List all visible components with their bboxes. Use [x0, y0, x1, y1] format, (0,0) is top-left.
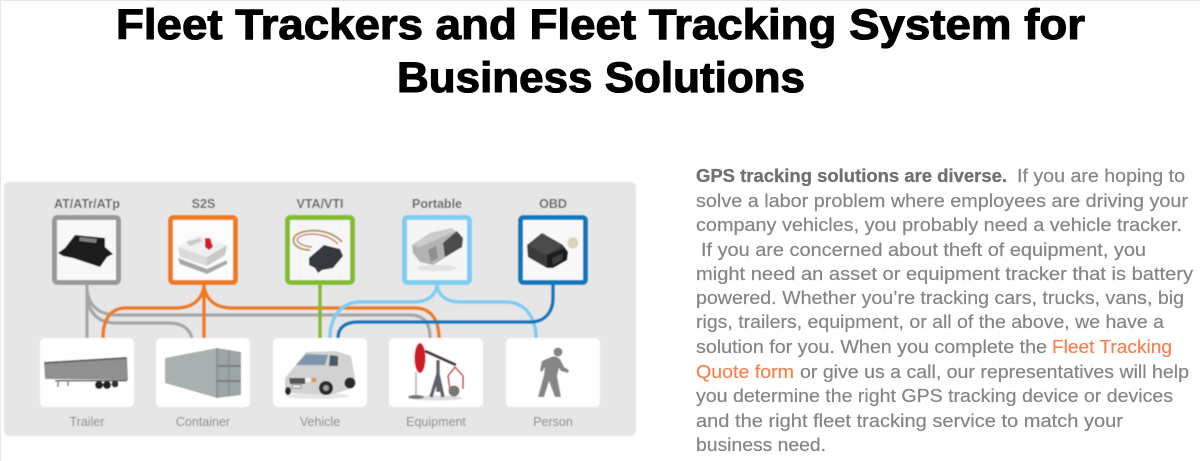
device: S2S: S2S: [192, 197, 215, 211]
text block: description: you determine the right GPS tracking device or devices: [696, 385, 1173, 406]
target: Trailer: [40, 338, 134, 429]
target: Trailer: Trailer: [70, 415, 104, 429]
icon: van: [285, 351, 356, 399]
target: Container: Container: [176, 415, 230, 429]
icon: trailer: [44, 357, 128, 389]
text block: description: business need.: [696, 434, 826, 455]
text block: description: solution for you. When you complete the: [696, 336, 1047, 357]
connector lines: orange from S2S: [103, 285, 439, 338]
device: OBD: [520, 197, 586, 282]
device: AT/ATr/ATp: [54, 197, 120, 282]
text block: description: rigs, trailers, equipment, or all of the above, we have a: [696, 311, 1165, 332]
icon: oil pumpjack: [408, 343, 463, 400]
device: OBD: OBD: [539, 197, 567, 211]
text block: description: or give us a call, our representatives will help: [800, 361, 1189, 382]
target: Vehicle: [273, 338, 367, 429]
icon: black tracker box: [58, 235, 113, 267]
text block: description: Fleet Tracking: [1052, 336, 1172, 357]
text block: description: GPS tracking solutions are diverse.: [696, 165, 1007, 186]
icon: shipping container: [165, 348, 241, 398]
target: Equipment: Equipment: [406, 415, 466, 429]
device: AT/ATr/ATp: AT/ATr/ATp: [54, 197, 120, 211]
icon: wired tracker: [293, 231, 343, 273]
text block: description: might need an asset or equipment tracker that is battery: [696, 263, 1194, 284]
text block: description: company vehicles, you probably need a vehicle tracker.: [696, 214, 1182, 235]
icon: white junction box: [178, 235, 227, 274]
device: Portable: Portable: [412, 197, 462, 211]
text block: description: solve a labor problem where employees are driving your: [696, 190, 1188, 211]
connector line: blue from OBD: [338, 285, 553, 338]
icon: walking person: [538, 348, 569, 397]
target: Container: [156, 338, 250, 429]
text block: description: If you are concerned about theft of equipment, you: [701, 239, 1146, 260]
text block: description: [696, 165, 1194, 455]
icon: portable tracker: [412, 228, 463, 271]
text block: description: If you are hoping to: [1017, 165, 1185, 186]
connector lines: gray from AT/ATr/ATp: [87, 285, 430, 338]
text block: description: and the right fleet tracking service to match your: [696, 410, 1123, 431]
target: Person: [506, 338, 600, 429]
target: Person: Person: [533, 415, 573, 429]
target: Vehicle: Vehicle: [300, 415, 340, 429]
device: Portable: [404, 197, 470, 282]
panel: tracker diagram: [4, 182, 636, 436]
connector line: green from VTA/VTI: [318, 285, 322, 338]
target: Equipment: [389, 338, 483, 429]
title: Business Solutions: [397, 55, 805, 102]
icon: OBD plug: [527, 233, 578, 268]
device: VTA/VTI: [288, 197, 352, 282]
text block: description: Quote form: [696, 361, 794, 382]
title: Fleet Trackers and Fleet Tracking System for: [116, 2, 1085, 49]
title: [116, 2, 1085, 102]
text block: description: powered. Whether you’re tracking cars, trucks, vans, big: [696, 287, 1184, 308]
device: S2S: [170, 197, 236, 282]
device: VTA/VTI: VTA/VTI: [296, 197, 344, 211]
connector lines: light blue from Portable: [330, 285, 536, 338]
